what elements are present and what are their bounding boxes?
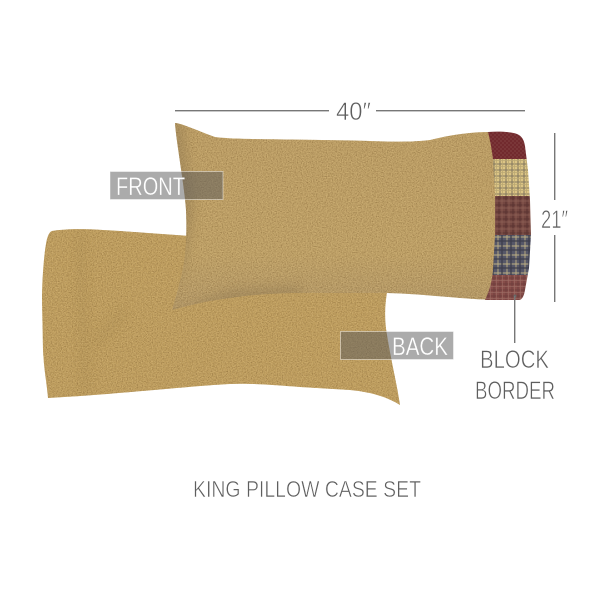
callout: block border: BLOCK: [480, 346, 549, 374]
height dimension: 21 inches: 21″: [541, 206, 568, 234]
width dimension: 40 inches: 40″: [336, 98, 371, 126]
callout: block border: BORDER: [475, 377, 555, 405]
label: back: [340, 332, 454, 361]
pillow body: [172, 123, 498, 310]
label: front: FRONT: [116, 173, 185, 201]
label: back: BACK: [392, 333, 448, 361]
back pillow case: [42, 229, 400, 405]
callout: block border: [475, 294, 555, 405]
caption: KING PILLOW CASE SET: [193, 476, 421, 502]
block border patches: [485, 132, 531, 300]
front pillow case: [172, 123, 531, 310]
